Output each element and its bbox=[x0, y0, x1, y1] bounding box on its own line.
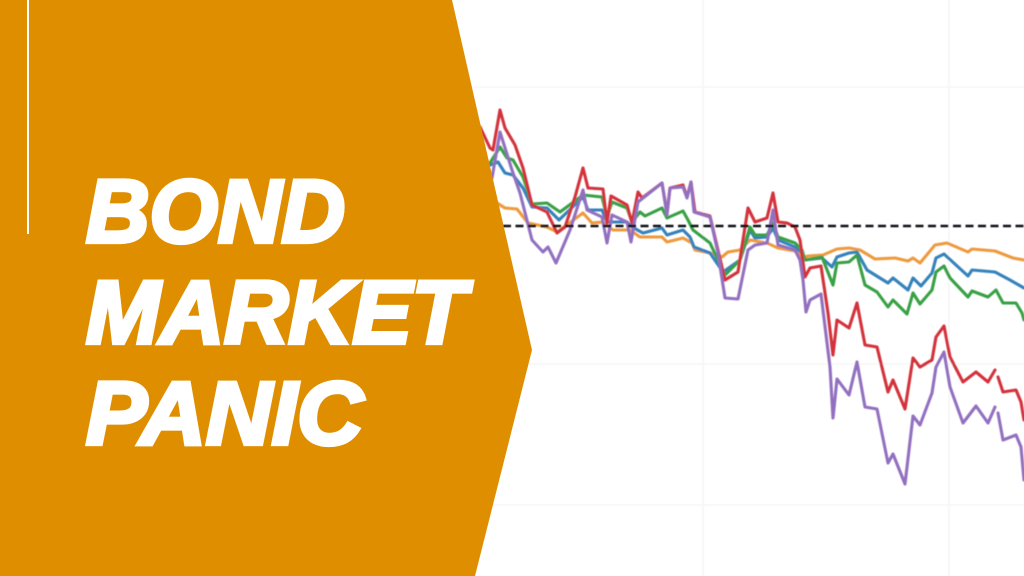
series: orange line bbox=[497, 203, 1024, 263]
reference line: dashed bbox=[503, 225, 1024, 227]
line chart: bond yields bbox=[460, 0, 1024, 576]
panel: orange chevron bbox=[0, 0, 532, 576]
series: red line bbox=[480, 110, 1024, 420]
title: Bond Market Panic: MARKET bbox=[86, 262, 473, 362]
series: purple line bbox=[492, 132, 1024, 484]
series: blue line bbox=[490, 162, 1024, 290]
title: Bond Market Panic: BOND bbox=[86, 161, 345, 261]
title: Bond Market Panic: PANIC bbox=[86, 363, 365, 463]
decorative accent: vertical white rule bbox=[27, 0, 29, 234]
series: green line bbox=[490, 147, 1024, 320]
title: Bond Market Panic bbox=[86, 161, 473, 463]
